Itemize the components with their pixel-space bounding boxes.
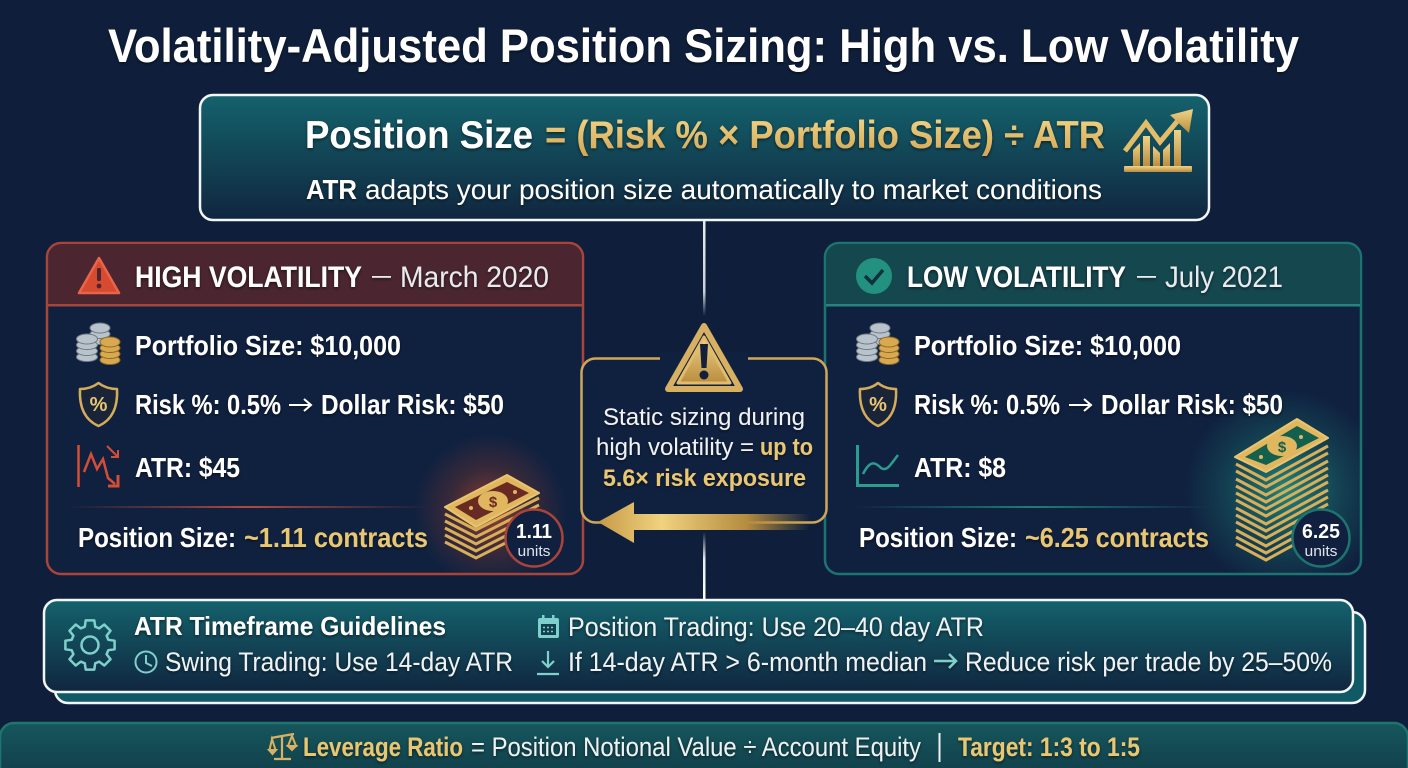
text: target: Target: 1:3 to 1:5 bbox=[958, 732, 1140, 762]
heading: high volatility bbox=[135, 261, 549, 294]
heading: low volatility bbox=[907, 261, 1283, 294]
icon: clock bbox=[136, 652, 156, 672]
text: portfolio size: Portfolio Size: $10,000 bbox=[914, 330, 1181, 361]
heading: high volatility: HIGH VOLATILITY bbox=[135, 261, 362, 294]
text: swing trading: Swing Trading: Use 14-day ATR bbox=[165, 647, 513, 677]
divider bbox=[68, 506, 430, 508]
text: ATR value: ATR: $8 bbox=[914, 452, 1006, 483]
icon: down arrow bbox=[537, 651, 559, 674]
text: risk percent: Risk %: 0.5% bbox=[135, 389, 281, 420]
icon: warning triangle bbox=[79, 258, 119, 293]
icon: rising bar chart bbox=[1124, 109, 1193, 172]
callout: static sizing warning bbox=[582, 326, 826, 543]
icon: tall money stack bbox=[1235, 419, 1328, 560]
formula subtitle: adapts your position size automatically to market conditions bbox=[365, 174, 1102, 205]
callout text: Static sizing during bbox=[603, 404, 805, 431]
text: leverage ratio bbox=[303, 732, 922, 762]
panel: high volatility bbox=[47, 243, 583, 586]
panel: low volatility bbox=[825, 243, 1385, 590]
formula subtitle: ATR bbox=[306, 174, 357, 205]
text: leverage ratio: = Position Notional Value ÷ Account Equity bbox=[471, 732, 922, 762]
icon: balance scale bbox=[269, 734, 296, 759]
icon: check circle bbox=[856, 258, 892, 294]
heading: ATR timeframe guidelines: ATR Timeframe Guidelines bbox=[134, 611, 446, 641]
result: position size: Position Size: bbox=[78, 522, 236, 553]
text: ATR rule: If 14-day ATR > 6-month median bbox=[568, 647, 927, 677]
text: ATR rule: Reduce risk per trade by 25–50% bbox=[965, 647, 1332, 677]
text: risk percent: Dollar Risk: $50 bbox=[1101, 389, 1283, 420]
badge: 1.11 units: units bbox=[518, 543, 550, 560]
result: position size: ~1.11 contracts bbox=[244, 522, 428, 553]
divider bar bbox=[938, 733, 940, 762]
icon: risk shield bbox=[860, 383, 896, 426]
result: position size bbox=[859, 522, 1209, 553]
panel: leverage ratio bar bbox=[0, 723, 1408, 768]
icon: gear bbox=[65, 620, 115, 670]
badge: 6.25 units bbox=[1292, 510, 1350, 566]
glow behind money stack bbox=[421, 441, 559, 572]
glow behind money stack bbox=[1196, 402, 1360, 572]
icon: calendar bbox=[538, 615, 559, 638]
icon: risk shield: % bbox=[869, 394, 887, 416]
panel: ATR timeframe guidelines bbox=[44, 600, 1353, 692]
connector line: bottom bbox=[703, 532, 706, 600]
icon: coins bbox=[76, 323, 120, 364]
text: position trading: Position Trading: Use 20–40 day ATR bbox=[568, 612, 984, 642]
text: ATR value: ATR: $45 bbox=[135, 452, 240, 483]
badge: 1.11 units: 1.11 bbox=[516, 521, 552, 543]
icon: volatile ATR chart bbox=[78, 445, 118, 487]
arrow: pointing to high volatility bbox=[598, 502, 810, 543]
callout text: up to bbox=[760, 434, 813, 461]
icon: small money stack bbox=[445, 475, 539, 558]
badge: 6.25 units: units bbox=[1304, 543, 1338, 560]
panel: formula bbox=[200, 95, 1209, 220]
badge: 1.11 units bbox=[506, 510, 562, 566]
heading: low volatility: July 2021 bbox=[1165, 261, 1283, 294]
title: Volatility-Adjusted Position Sizing: High vs. Low Volatility bbox=[108, 19, 1299, 72]
panel header: high volatility bbox=[48, 244, 582, 306]
text: risk percent bbox=[135, 389, 504, 420]
icon: risk shield bbox=[80, 383, 117, 426]
text: risk percent: Dollar Risk: $50 bbox=[321, 389, 504, 420]
icon: coins bbox=[856, 323, 899, 364]
callout text: high volatility = bbox=[596, 434, 754, 461]
icon: warning triangle bbox=[660, 326, 748, 389]
result: position size: ~6.25 contracts bbox=[1025, 522, 1209, 553]
result: position size: Position Size: bbox=[859, 522, 1017, 553]
connector line: top bbox=[703, 220, 706, 316]
callout text: 5.6× risk exposure bbox=[603, 465, 806, 492]
badge: 6.25 units: 6.25 bbox=[1302, 521, 1340, 543]
panel: back card bbox=[55, 612, 1365, 703]
text: portfolio size: Portfolio Size: $10,000 bbox=[135, 330, 401, 361]
icon: tall money stack: $ bbox=[1278, 439, 1287, 456]
panel header: low volatility bbox=[826, 244, 1360, 306]
heading: high volatility: March 2020 bbox=[400, 261, 549, 294]
callout text bbox=[596, 404, 813, 492]
formula text: Position Size bbox=[305, 114, 533, 157]
icon: small money stack: $ bbox=[489, 494, 498, 511]
heading: low volatility: LOW VOLATILITY bbox=[907, 261, 1126, 294]
text: ATR rule bbox=[568, 647, 1332, 677]
divider bbox=[855, 506, 1210, 508]
result: position size bbox=[78, 522, 428, 553]
text: risk percent: Risk %: 0.5% bbox=[914, 389, 1060, 420]
icon: calm ATR chart bbox=[858, 445, 899, 486]
icon: risk shield: % bbox=[90, 394, 108, 416]
formula text bbox=[305, 114, 1105, 157]
formula text: = (Risk % × Portfolio Size) ÷ ATR bbox=[545, 114, 1105, 157]
text: leverage ratio: Leverage Ratio bbox=[303, 732, 463, 762]
text: risk percent bbox=[914, 389, 1283, 420]
